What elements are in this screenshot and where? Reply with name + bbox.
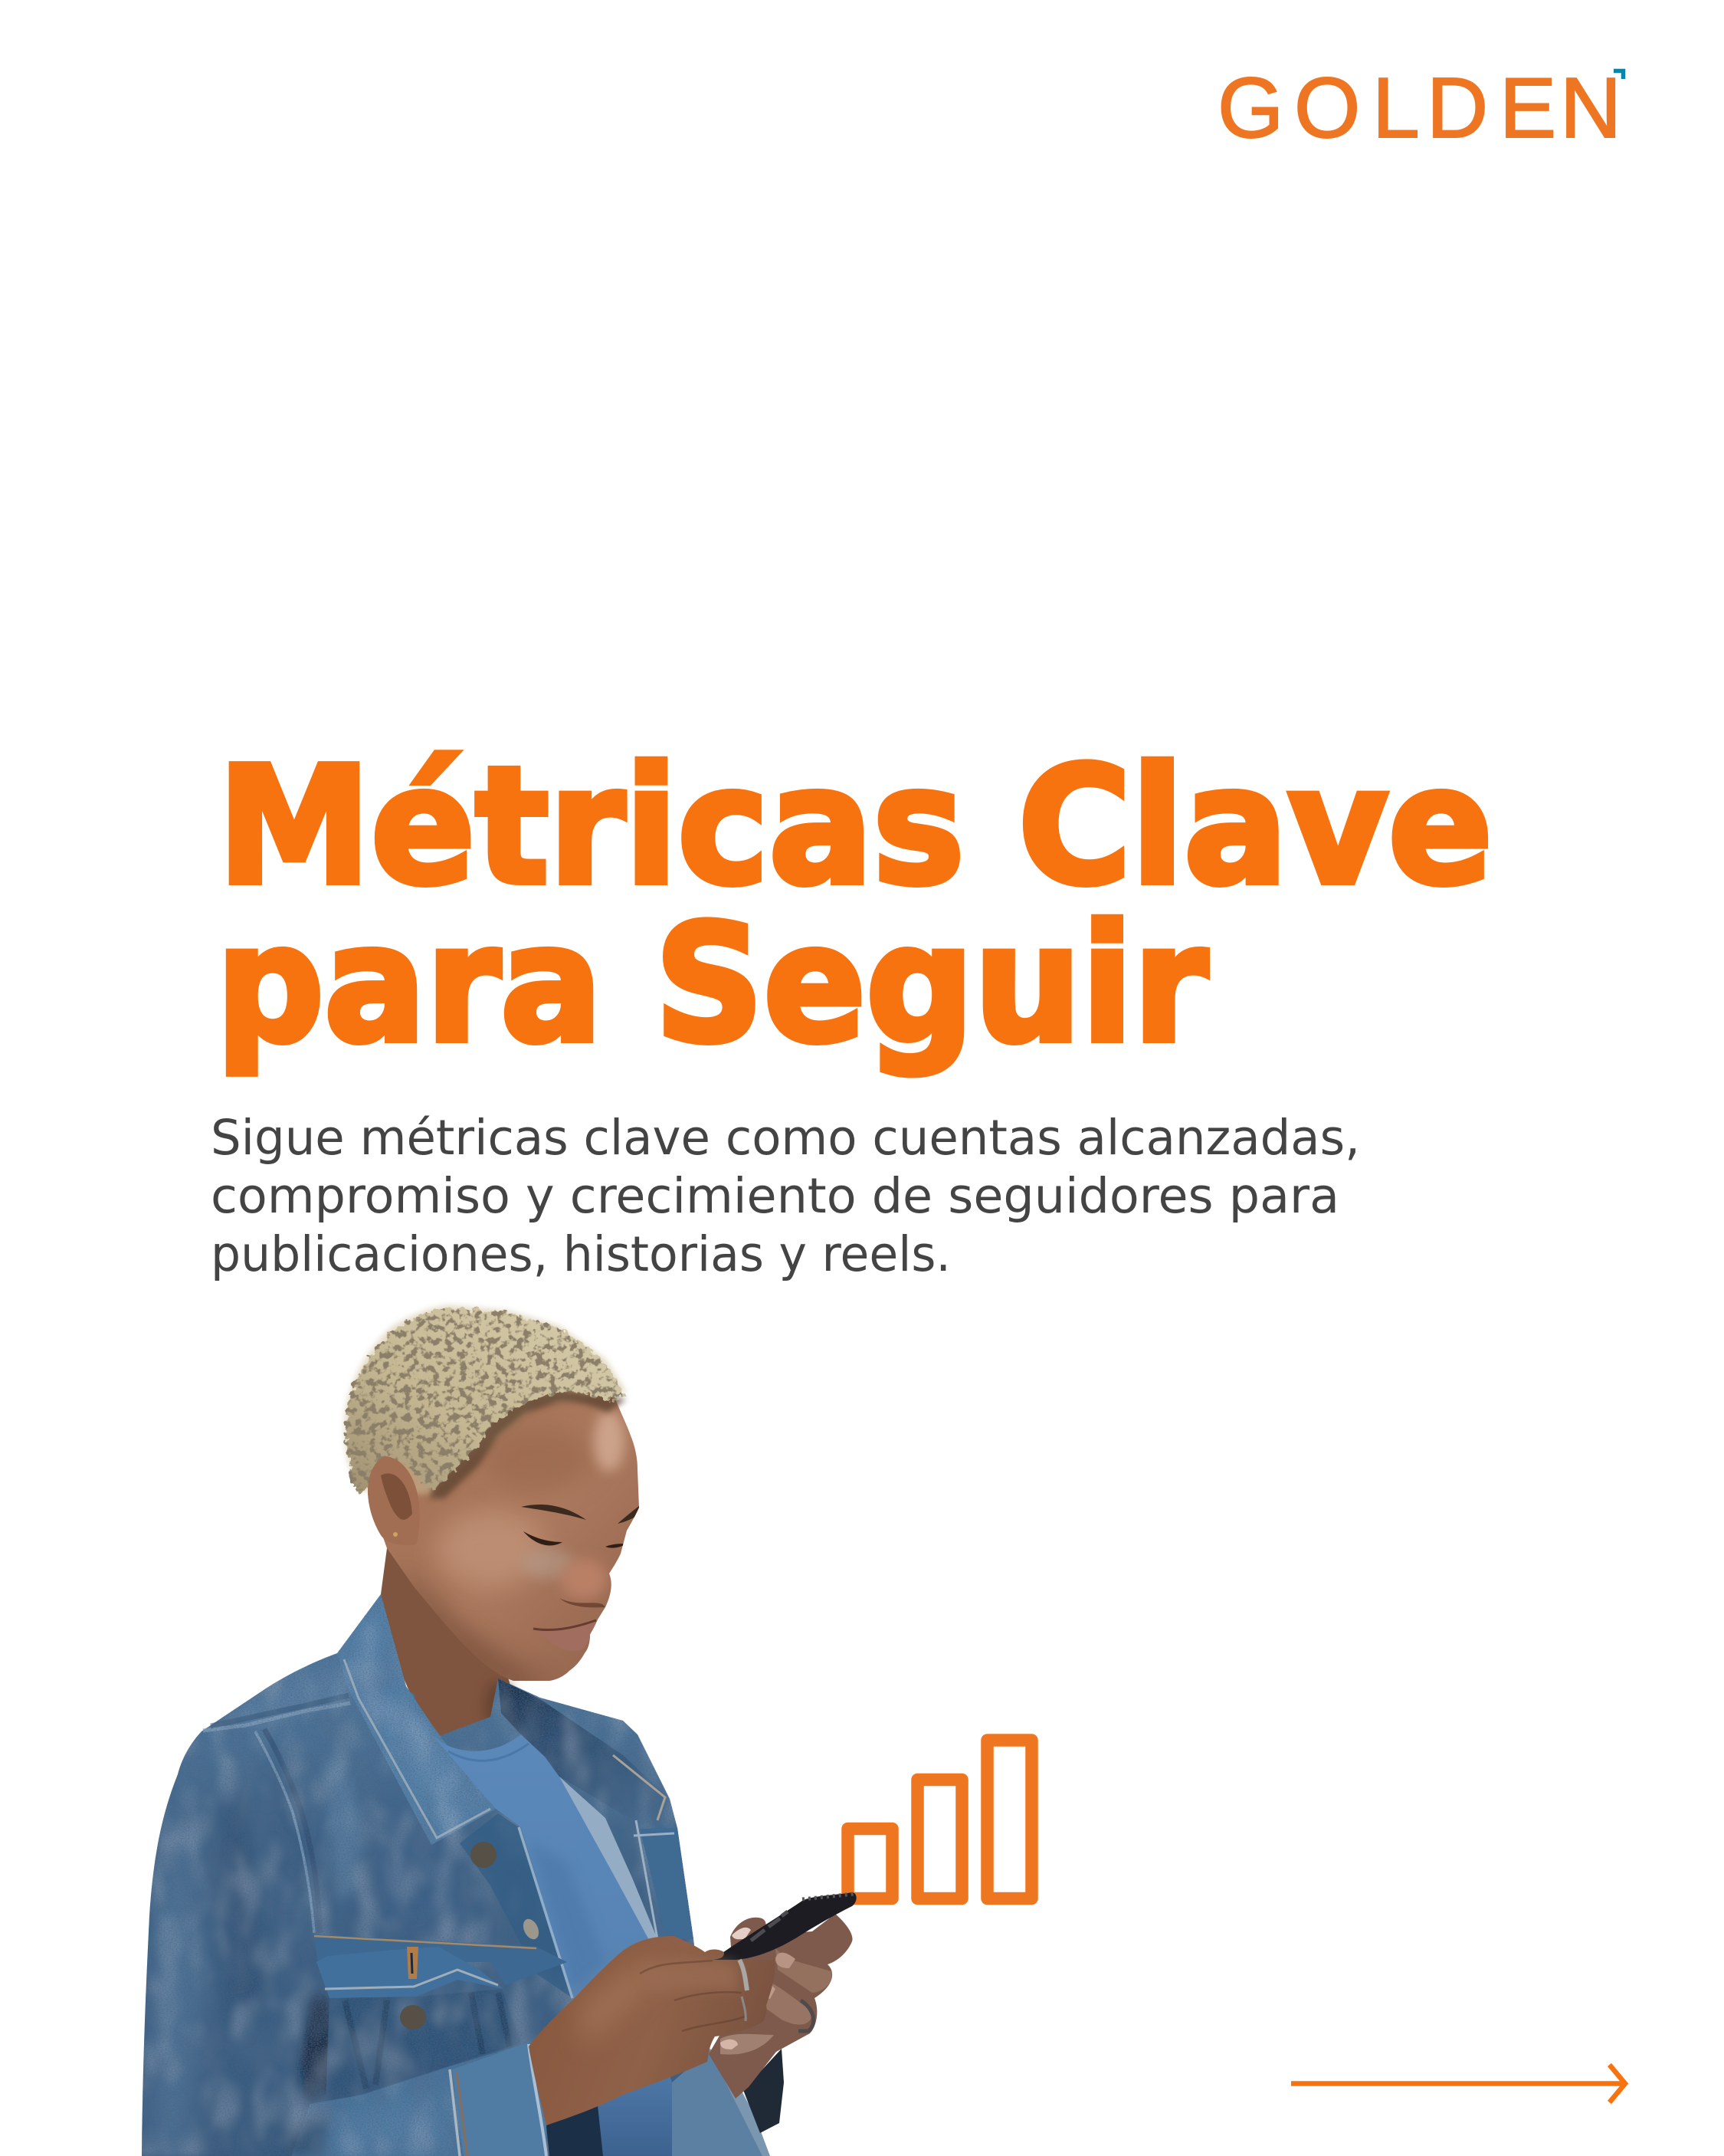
t-shirt	[433, 1734, 672, 2156]
shirt shadow near placket	[529, 1839, 605, 1993]
hair	[346, 1308, 624, 1495]
neck shading	[484, 1682, 521, 1734]
hand highlights	[578, 1958, 659, 2046]
eyebrows	[521, 1505, 586, 1520]
hair halo	[345, 1305, 627, 1495]
jacket body	[142, 1594, 694, 2156]
subtitle text: Sigue métricas clave como cuentas alcanzadas,	[211, 1110, 1360, 1166]
jacket shading	[146, 1859, 205, 2156]
yoke seam	[203, 1703, 350, 1731]
near hand and forearm	[529, 1936, 775, 2125]
finger creases	[640, 1961, 747, 2031]
dark inner collar	[498, 1679, 670, 1825]
neck	[381, 1548, 521, 1752]
collar stitching	[344, 1659, 490, 1838]
title	[216, 732, 1493, 1078]
face	[368, 1390, 639, 1681]
front body below pocket	[326, 1990, 510, 2097]
jacket front placket	[460, 1813, 572, 1998]
far hand fingers	[775, 1948, 832, 1993]
t-shirt collar rib	[448, 1744, 529, 1761]
side pocket	[640, 1828, 693, 1939]
title: Métricas Clave	[218, 732, 1493, 920]
lips	[540, 1621, 595, 1651]
arrow	[1291, 2065, 1625, 2102]
icon: bar chart	[847, 1740, 1031, 1898]
photo: woman with denim jacket looking at phone	[142, 1305, 857, 2156]
chest pocket flap	[314, 1934, 567, 1998]
far sleeve lower right	[672, 2049, 766, 2156]
left collar	[337, 1594, 496, 1845]
phone	[713, 1892, 857, 1960]
subtitle text: publicaciones, historias y reels.	[211, 1226, 951, 1282]
nails	[732, 1928, 751, 1939]
jacket sleeve cuff	[452, 2043, 546, 2156]
title: para Seguir	[216, 890, 1208, 1078]
logo: GOLDEN: GOLDEN	[1218, 61, 1621, 156]
subtitle text	[211, 1110, 1360, 1282]
rings	[739, 1960, 747, 1990]
black sleeve opening	[743, 2049, 784, 2133]
forearm sleeve	[291, 2043, 548, 2156]
ear	[368, 1456, 420, 1545]
subtitle text: compromiso y crecimiento de seguidores para	[211, 1168, 1339, 1224]
right jacket panel	[653, 1829, 693, 1938]
far hand	[709, 1914, 853, 2099]
jacket lining strip	[559, 1777, 657, 1941]
dark jacket strip below wrist	[546, 2105, 603, 2156]
jacket buttons	[400, 1842, 542, 2030]
nose shadow	[559, 1598, 605, 1607]
eyes	[523, 1531, 562, 1545]
dark crease between arm and body	[303, 1993, 337, 2104]
armhole seam	[255, 1731, 314, 1933]
hairline shadow	[429, 1389, 626, 1498]
